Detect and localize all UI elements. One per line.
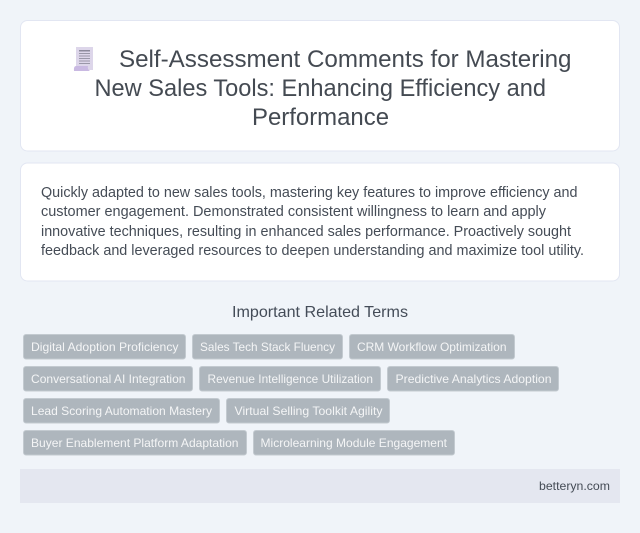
chip: Buyer Enablement Platform Adaptation — [24, 430, 246, 455]
chip: Revenue Intelligence Utilization: Revenue Intelligence Utilization — [208, 372, 373, 386]
chip: Virtual Selling Toolkit Agility: Virtual Selling Toolkit Agility — [234, 404, 382, 418]
text block: summary paragraph — [41, 185, 584, 259]
title — [94, 46, 572, 131]
text block: summary paragraph: feedback and leveraged resources to deepen understanding and maximize tool utility. — [41, 243, 584, 259]
chip: Virtual Selling Toolkit Agility — [226, 398, 390, 423]
icon: document scroll — [74, 47, 93, 71]
chip: Lead Scoring Automation Mastery — [24, 398, 220, 423]
chip: Conversational AI Integration — [24, 366, 192, 391]
title: New Sales Tools: Enhancing Efficiency and — [94, 75, 546, 102]
chip: Sales Tech Stack Fluency: Sales Tech Stack Fluency — [200, 340, 335, 354]
text block: summary paragraph: Quickly adapted to new sales tools, mastering key features to improve efficiency and — [41, 185, 578, 201]
text block: summary paragraph: customer engagement. Demonstrated consistent willingness to learn and apply — [41, 204, 547, 220]
chip: Buyer Enablement Platform Adaptation: Buyer Enablement Platform Adaptation — [31, 436, 238, 450]
title: Performance — [252, 104, 389, 131]
text block: summary paragraph: innovative techniques, resulting in enhanced sales performance. Proactively sought — [41, 224, 571, 240]
chip: Microlearning Module Engagement: Microlearning Module Engagement — [260, 436, 448, 450]
chip: Digital Adoption Proficiency: Digital Adoption Proficiency — [31, 340, 178, 354]
heading: related terms: Important Related Terms — [232, 304, 408, 321]
chip: CRM Workflow Optimization: CRM Workflow Optimization — [357, 340, 506, 354]
chip: Sales Tech Stack Fluency — [192, 334, 342, 359]
panel: term chips — [24, 334, 558, 455]
panel: summary card — [20, 163, 620, 281]
chip: Predictive Analytics Adoption — [388, 366, 558, 391]
chip: CRM Workflow Optimization — [350, 334, 514, 359]
chip: Conversational AI Integration: Conversational AI Integration — [31, 372, 186, 386]
title: Self-Assessment Comments for Mastering — [119, 46, 572, 73]
chip: Predictive Analytics Adoption: Predictive Analytics Adoption — [396, 372, 552, 386]
chip: Digital Adoption Proficiency — [24, 334, 186, 359]
chip: Lead Scoring Automation Mastery: Lead Scoring Automation Mastery — [31, 404, 212, 418]
panel: title card — [20, 20, 620, 151]
footer — [20, 469, 620, 503]
chip: Microlearning Module Engagement — [254, 430, 454, 455]
footer: site name: betteryn.com — [539, 479, 610, 493]
chip: Revenue Intelligence Utilization — [200, 366, 380, 391]
